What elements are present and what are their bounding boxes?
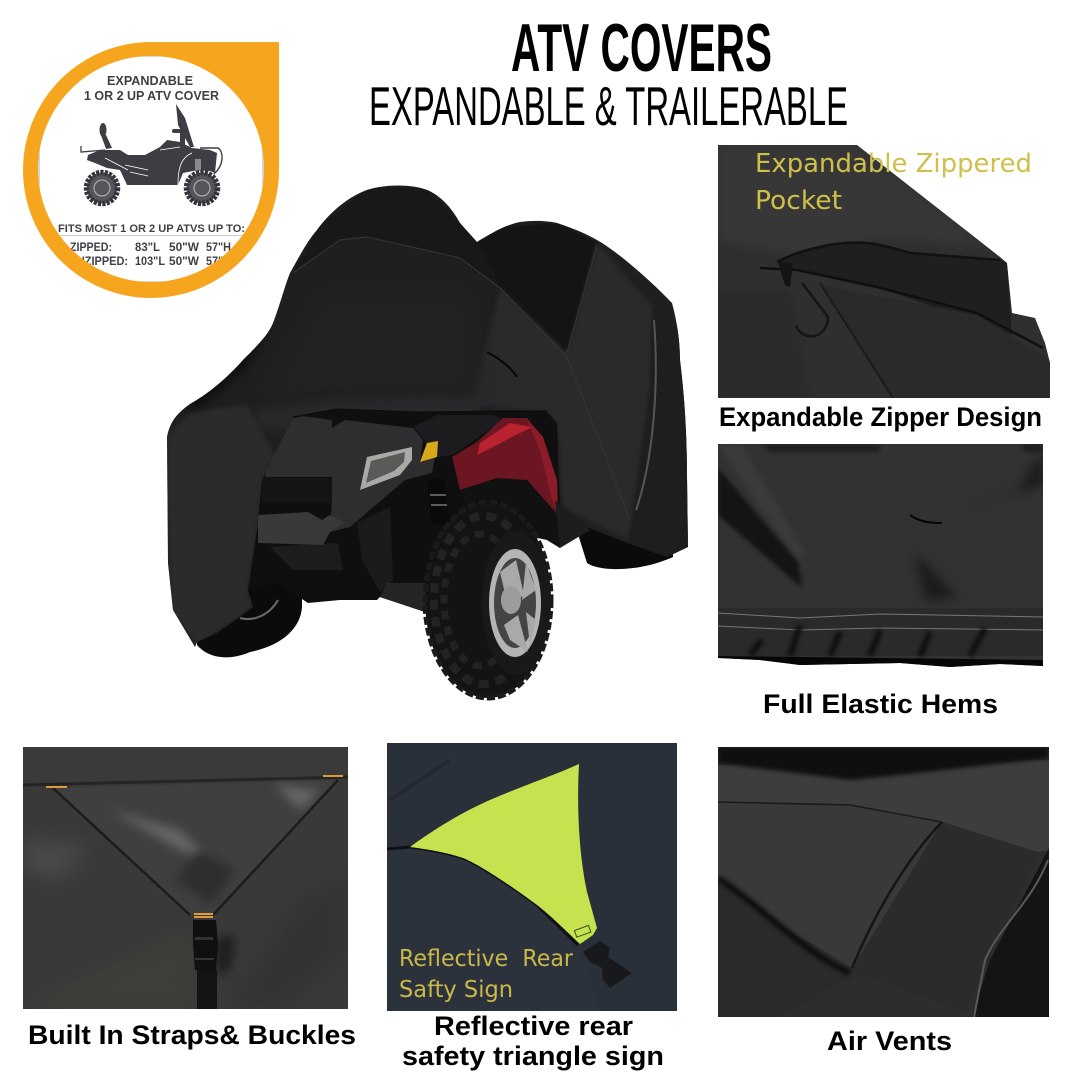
badge fit text: 50"W [169,256,199,268]
sidewall [482,531,550,675]
panel: air vents [718,747,1049,1017]
headlamp interior [366,452,405,483]
yellow reflector [420,441,438,462]
wheel well [460,480,560,548]
frame bar [380,583,427,612]
pocket caption on photo [755,149,1032,216]
light vertical seam [636,320,656,510]
left drape panel [167,405,275,645]
badge fit text: 103"L [135,256,165,268]
panel: reflective rear safety triangle [387,743,677,1011]
label: reflective rear safety triangle sign: safety triangle sign [402,1041,664,1071]
shock absorber [427,478,450,525]
badge fit text: FITS MOST 1 OR 2 UP ATVS UP TO: [58,223,245,235]
hero photo: covered ATV [160,180,700,698]
badge fit text: 57"H [206,242,231,254]
icon: ATV wheels [86,172,218,204]
label: air vents: Air Vents [827,1026,952,1056]
mud flap [555,500,590,548]
left shadow fold [190,330,260,408]
far front wheel [197,560,302,657]
badge: expandable fit guide [23,42,279,298]
shock highlights [430,495,447,505]
strap and buckle [193,913,218,1009]
reflective caption on photo: Reflective Rear [399,946,574,972]
spokes [500,560,536,652]
badge heading [84,76,219,100]
badge fit text [58,224,244,265]
dark rear panel [477,223,597,353]
pocket caption on photo: Expandable Zippered [755,149,1032,179]
badge fit text: 83"L [135,242,160,254]
strap stitching marks [46,775,343,788]
headlamp [360,447,412,490]
zipper pull [778,262,793,287]
rear wheel under cover [572,515,673,569]
label: reflective rear safety triangle sign: Reflective rear [434,1011,634,1041]
bumper [258,512,345,545]
badge fit text: UNZIPPED: [69,256,128,268]
mesh band [262,478,332,503]
front right wheel [425,502,551,698]
side panel [470,243,653,540]
reflective caption on photo: Safty Sign [399,977,513,1003]
top deck [413,415,503,457]
front fascia [330,420,435,532]
title: ATV COVERS [511,10,772,86]
pocket caption on photo: Pocket [755,186,842,216]
red fender [452,418,590,548]
label: expandable zipper design: Expandable Zipper Design [719,402,1042,432]
badge heading: EXPANDABLE [107,74,193,88]
tire [425,502,551,698]
soft light on front face [260,290,480,400]
reflective caption on photo [399,946,574,1003]
well and shadow base [245,405,575,612]
badge fit text: 50"W [169,242,199,254]
chassis column [357,507,393,592]
zip slit [487,352,517,377]
panel: built in straps and buckles [23,747,348,1009]
far wheel rim [240,600,278,619]
far right panel [673,327,688,554]
ATV front body and chassis [245,405,575,612]
lower front band [259,401,477,426]
panel: expandable zippered pocket [718,145,1053,399]
panel: full elastic hems [718,444,1043,670]
seams [293,237,630,520]
rim [489,549,541,657]
hem shadow [293,410,547,418]
icon: ATV silhouette [81,104,222,185]
hub [501,586,521,614]
badge heading: 1 OR 2 UP ATV COVER [84,89,219,103]
upper dark panel [265,415,332,477]
buckle [583,941,632,988]
badge fit text: 57"H [206,256,231,268]
label: reflective rear safety triangle sign [402,1011,664,1071]
tread knobs [434,516,534,684]
upper hood panel [314,187,478,242]
label: built in straps and buckles: Built In Straps& Buckles [28,1020,356,1050]
radiator mesh [270,543,343,570]
zipper loop [797,283,828,336]
badge fit text: ZIPPED: [70,242,112,254]
label: full elastic hems: Full Elastic Hems [763,689,998,719]
cover fabric [167,186,688,647]
